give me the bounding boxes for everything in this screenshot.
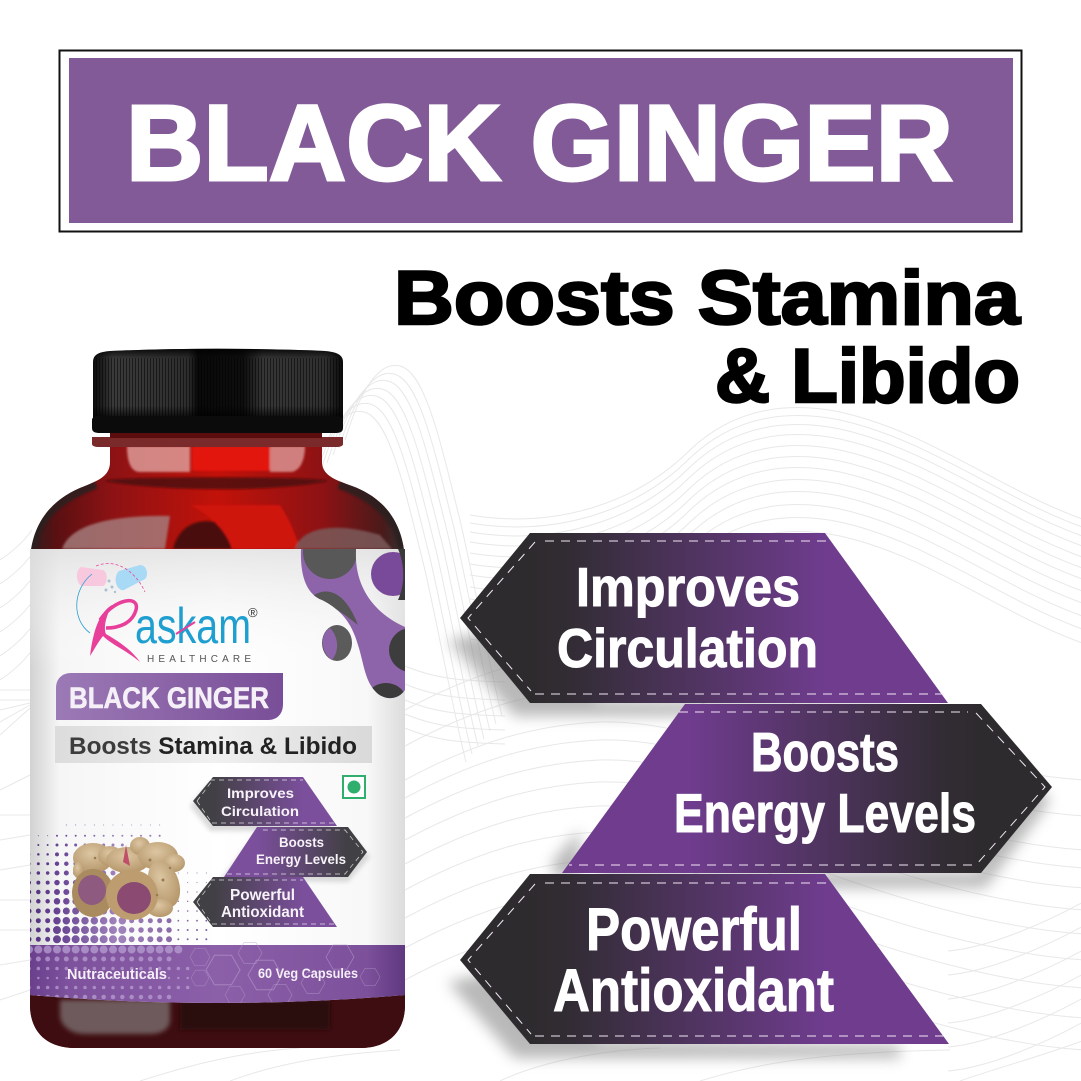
banner shape [562,704,1052,873]
logo: askam [135,598,251,654]
heading [394,256,1021,419]
mini banners: Powerful [230,887,295,904]
veg mark [343,776,365,798]
benefit banner 1 [460,533,948,703]
mini banners: Improves [227,785,294,801]
benefit banner 2: Energy Levels [674,782,976,844]
mini banners [190,777,370,927]
logo: ® [248,605,258,620]
benefit banner 2 [562,704,1052,873]
bottle [29,348,433,1048]
mini banners: Antioxidant [221,904,305,921]
heading line 2: & Libido [715,334,1020,419]
banner shadows [448,625,1050,1058]
banner text: Improves [576,556,800,618]
ginger root illustration [72,837,186,920]
banner text: Powerful [586,896,802,963]
title frame [60,50,1022,232]
bottom purple band: Nutraceuticals [67,966,167,983]
graphic: purple blob [300,549,405,698]
background wave lines [0,365,1081,1081]
mini banner 1 [193,777,337,826]
mini banner 3 [193,877,337,927]
benefit banner 3 [460,874,949,1044]
subtitle bar [55,726,372,763]
label [30,549,405,1003]
stitching [569,712,1045,865]
glass reflections [30,446,405,1048]
banner shape [460,874,949,1044]
product name pill: BLACK GINGER [69,682,269,715]
bottle glass [30,447,405,1048]
benefit banner 3: Antioxidant [553,957,834,1024]
banner shape [460,533,948,703]
mini banners: Energy Levels [256,851,346,867]
stitching [468,883,946,1036]
logo [77,564,258,665]
cap [92,348,343,447]
mini banner 2 [224,827,367,877]
mini banners: Circulation [221,803,299,819]
subtitle bar: Boosts Stamina & Libido [69,733,357,760]
mini banners: Boosts [279,834,324,850]
benefit banner 1: Circulation [557,617,818,679]
bottom purple band [29,943,405,1010]
title text: BLACK GINGER [126,82,953,203]
title banner [60,50,1022,232]
halftone dots [29,825,207,939]
heading line 1: Boosts Stamina [394,256,1021,341]
bottom purple band: 60 Veg Capsules [258,965,358,981]
banner text: Boosts [751,721,899,783]
product name pill [56,673,283,720]
stitching [468,541,946,694]
title fill [69,58,1013,223]
logo: HEALTHCARE [147,654,251,665]
